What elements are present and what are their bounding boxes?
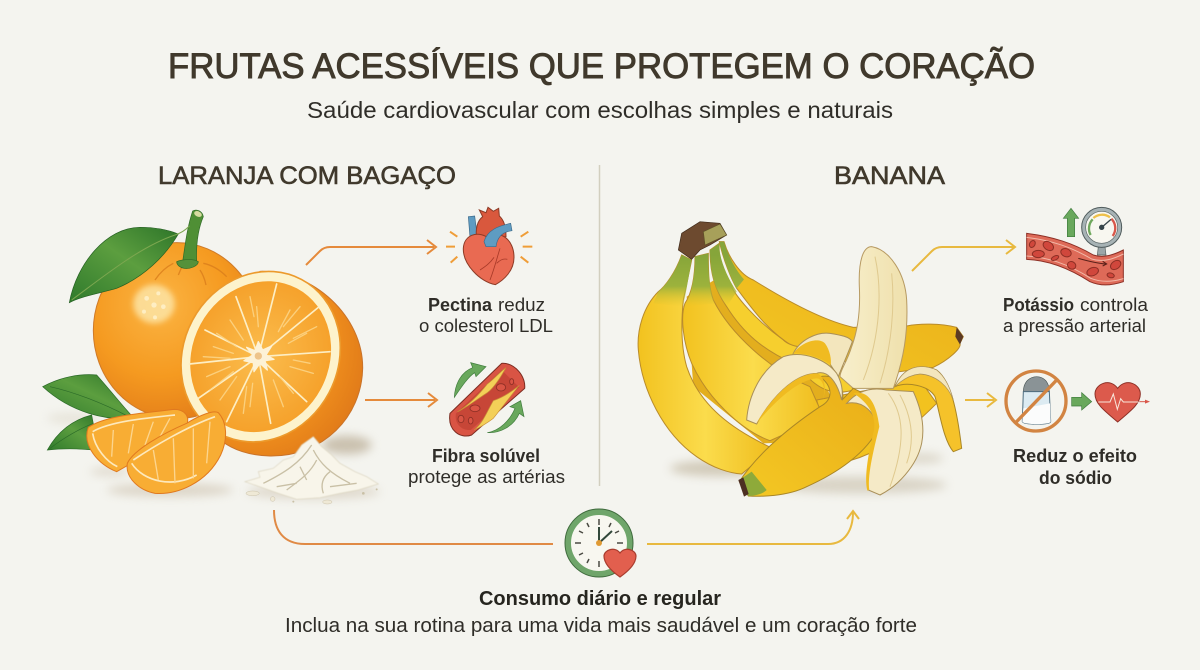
text: sódio: Reduz o efeito: [1013, 446, 1137, 466]
peel: back: [793, 333, 852, 377]
text: pectina: o colesterol LDL: [419, 316, 553, 336]
title: FRUTAS ACESSÍVEIS QUE PROTEGEM O CORAÇÃO: [168, 47, 1035, 86]
text: potássio: Potássio: [1003, 295, 1074, 315]
text: fibra solúvel: protege as artérias: [408, 467, 565, 487]
illustration: banana bunch: [638, 222, 963, 497]
connector: orange side: [274, 510, 553, 544]
icon: heart: [446, 207, 532, 285]
base fill between bananas: [687, 277, 847, 443]
arrow: orange to artery: [365, 393, 437, 407]
footer heading: Consumo diário e regular: [479, 588, 721, 610]
peeled banana flesh: [840, 247, 907, 388]
icon: back leaves: [43, 375, 134, 451]
heading: laranja com bagaço: LARANJA COM BAGAÇO: [158, 162, 456, 190]
banana: front with peels: [738, 355, 962, 497]
text: potássio: a pressão arterial: [1003, 316, 1146, 336]
icon: small heart: [604, 549, 636, 577]
text: sódio: [1013, 446, 1137, 488]
banana: left: [638, 255, 773, 474]
connector: banana side: [647, 511, 859, 544]
peel: front: [847, 389, 923, 495]
icon: no salt to heart: [1006, 371, 1150, 431]
footer text: Inclua na sua rotina para uma vida mais saudável e um coração forte: [285, 615, 917, 637]
peel: right: [895, 367, 962, 452]
text: potássio: [1003, 295, 1149, 336]
icon: clock with heart: [565, 509, 636, 577]
peel: left: [747, 355, 842, 424]
icon: artery with green arrows: [450, 363, 525, 436]
icon: top leaf: [69, 226, 189, 303]
orange slices: [87, 409, 226, 493]
text: fibra solúvel: [408, 446, 565, 487]
heading: banana: BANANA: [834, 162, 945, 190]
text: pectina: reduz: [498, 295, 545, 315]
subtitle: Saúde cardiovascular com escolhas simples e naturais: [307, 97, 893, 123]
icon: stem: [177, 210, 203, 269]
slice membranes: [189, 284, 330, 423]
arrow: orange to heart: [306, 240, 436, 265]
banana: third: [710, 243, 853, 392]
fibre powder pile: [245, 437, 378, 504]
text: sódio: do sódio: [1039, 468, 1112, 488]
half orange: [151, 243, 370, 470]
icon: blood vessel with gauge: [1027, 207, 1123, 285]
banana behind peel: [817, 380, 937, 461]
illustration: orange group: [43, 210, 380, 504]
arrow: banana to blood vessel: [912, 240, 1015, 271]
whole orange: [69, 210, 260, 419]
icon: crown stem: [678, 222, 727, 259]
arrow: banana to sodium: [965, 393, 996, 407]
text: pectina: [419, 295, 553, 336]
text: fibra solúvel: Fibra solúvel: [432, 446, 540, 466]
text: potássio: controla: [1080, 295, 1149, 315]
banana: second: [683, 253, 823, 441]
text: pectina: Pectina: [428, 295, 493, 315]
banana: back right: [719, 242, 963, 373]
